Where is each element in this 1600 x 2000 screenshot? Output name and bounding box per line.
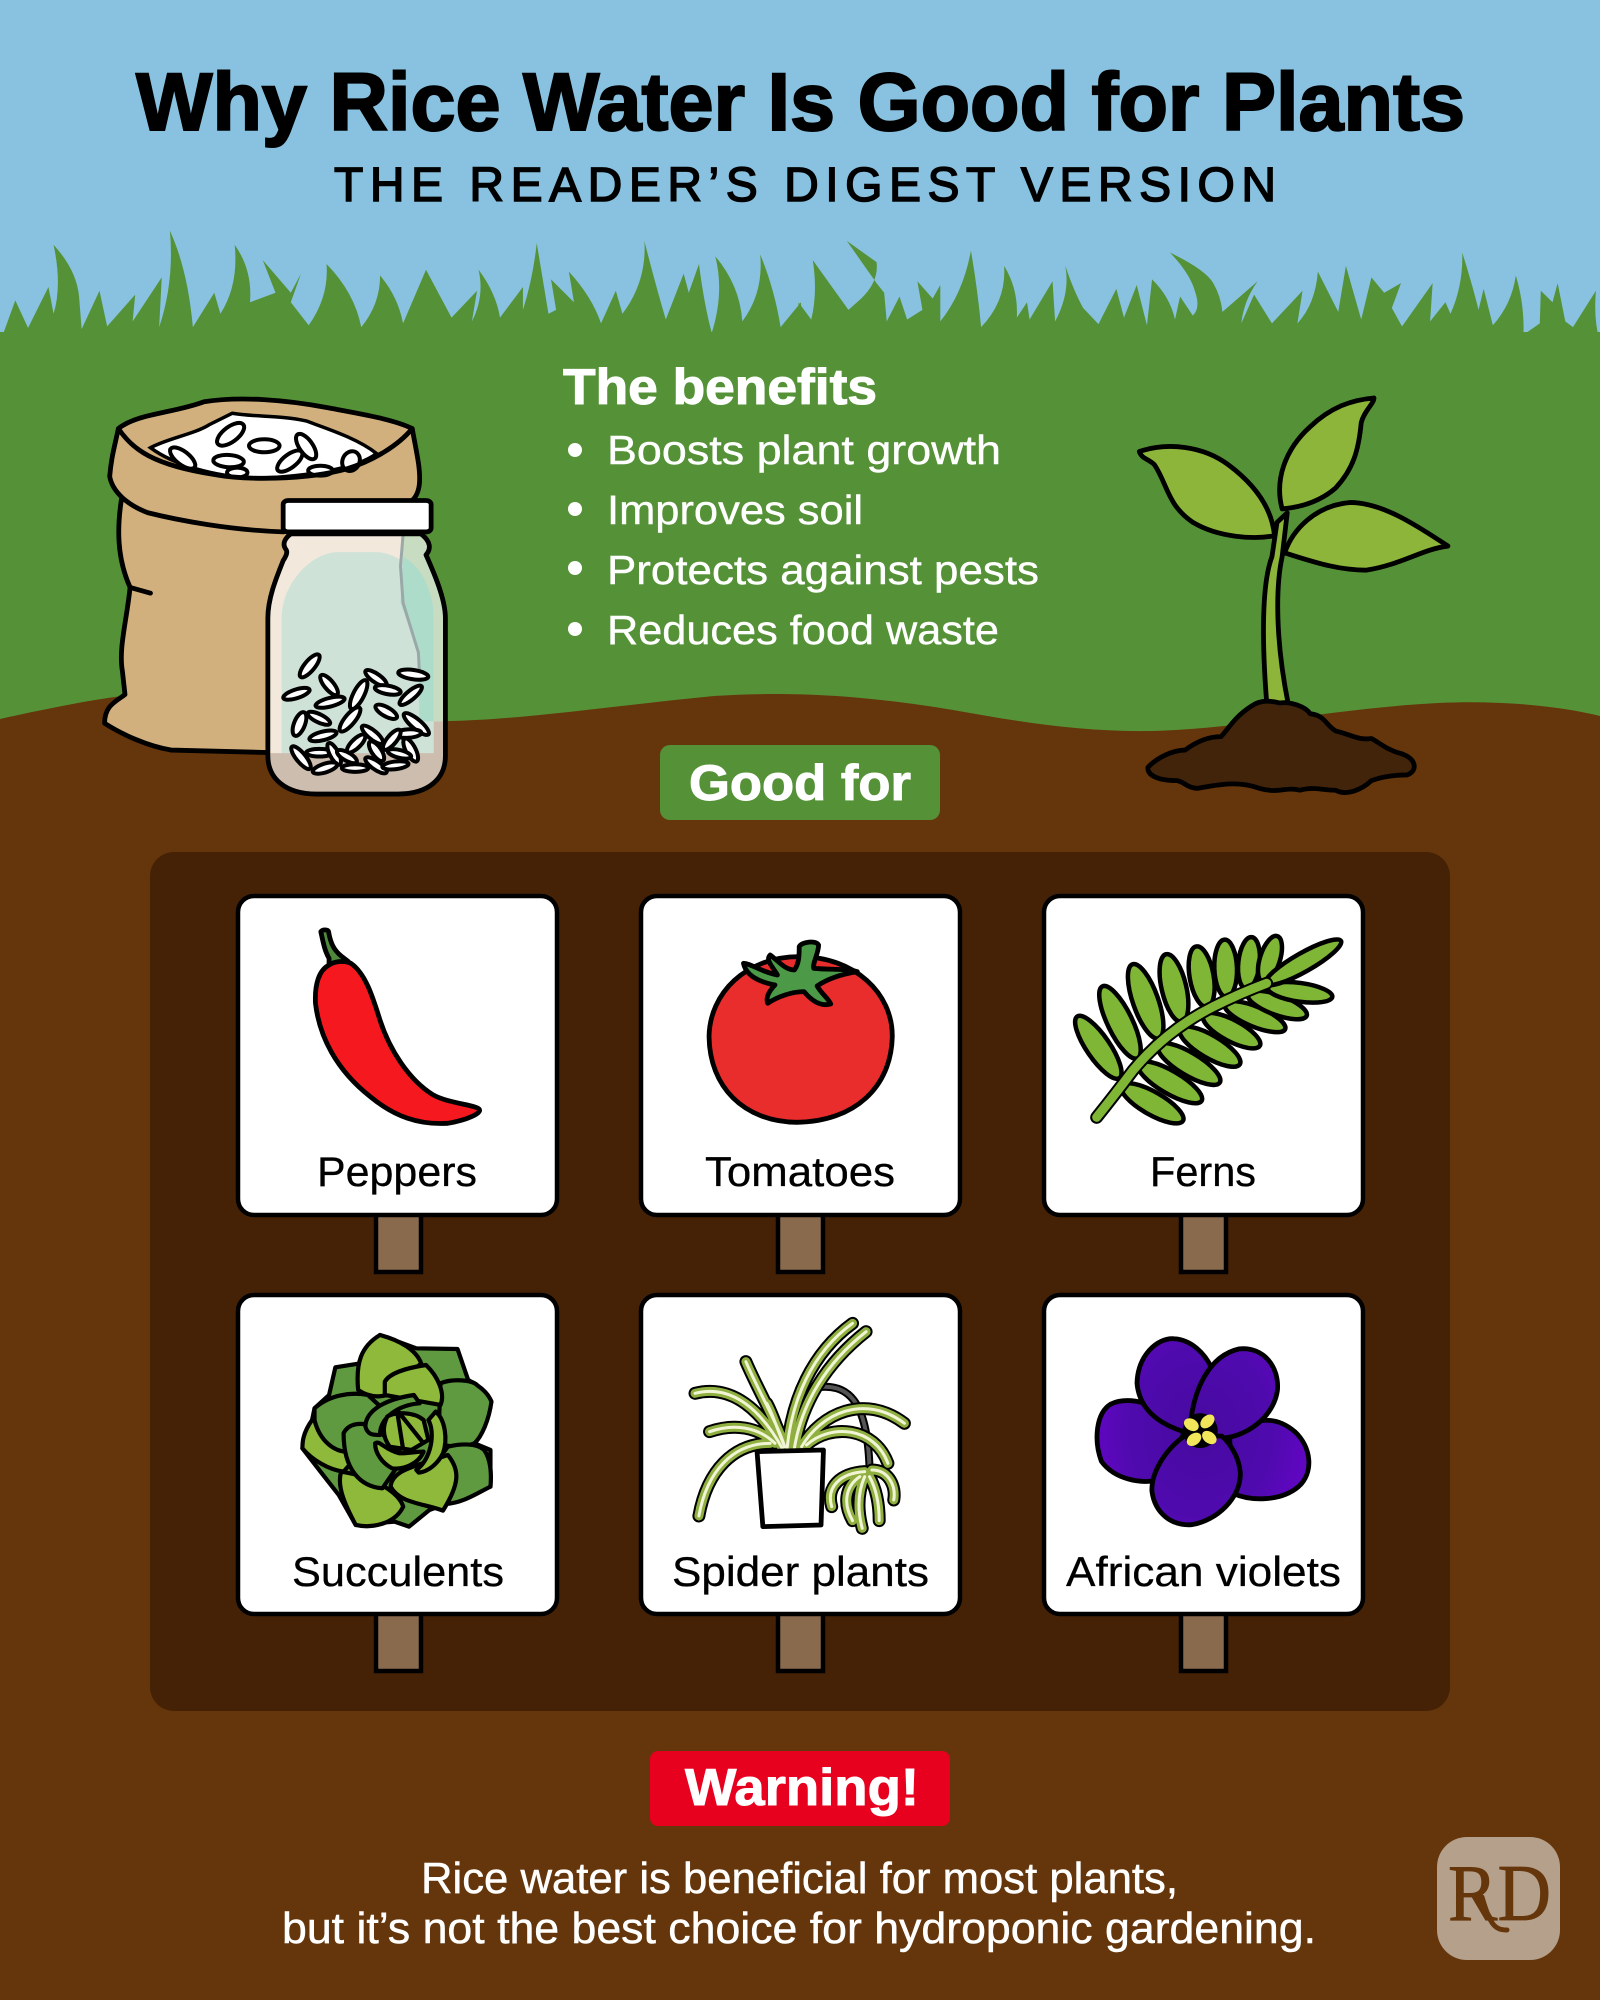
- soil ground: [0, 694, 1600, 2000]
- warning body text: but it’s not the best choice for hydroponic gardening.: [282, 1904, 1316, 1953]
- benefits heading: The benefits: [563, 359, 877, 415]
- benefits list: Reduces food waste: [607, 607, 999, 653]
- sign: tomatoes: [641, 896, 960, 1272]
- warning label: [650, 1751, 950, 1826]
- grass field: [0, 231, 1600, 752]
- RD logo: [1437, 1837, 1560, 1960]
- sign: succulents: Succulents: [292, 1548, 504, 1595]
- sign: african violets: [1044, 1295, 1363, 1671]
- panel: plant signs background: [150, 852, 1450, 1711]
- icon: jar of rice water: [268, 501, 445, 794]
- icon: fern frond: [1068, 933, 1346, 1131]
- icon: succulent rosette: [302, 1335, 491, 1527]
- icon: tomato: [709, 942, 892, 1122]
- icon: rice sack: [105, 399, 420, 753]
- subtitle: THE READER’S DIGEST VERSION: [334, 159, 1276, 212]
- benefits list: [568, 427, 1039, 653]
- good for label: [660, 745, 940, 820]
- sign: african violets: African violets: [1066, 1548, 1341, 1595]
- sign: peppers: Peppers: [317, 1148, 477, 1195]
- sign: spider plants: Spider plants: [672, 1548, 929, 1595]
- icon: chili pepper: [315, 930, 480, 1124]
- RD logo: RD: [1448, 1850, 1551, 1938]
- sky background: [0, 0, 1600, 760]
- benefits list: Improves soil: [607, 487, 863, 533]
- benefits list: Protects against pests: [607, 547, 1039, 593]
- icon: seedling in soil: [1139, 398, 1448, 793]
- warning label: Warning!: [685, 1759, 919, 1817]
- sign: ferns: [1044, 896, 1363, 1272]
- sign: peppers: [238, 896, 557, 1272]
- icon: spider plant in pot: [695, 1323, 904, 1528]
- sign: spider plants: [641, 1295, 960, 1671]
- title: Why Rice Water Is Good for Plants: [136, 57, 1465, 148]
- sign: tomatoes: Tomatoes: [705, 1148, 895, 1195]
- sign: ferns: Ferns: [1150, 1148, 1256, 1195]
- benefits list: Boosts plant growth: [607, 427, 1001, 473]
- warning body text: Rice water is beneficial for most plants,: [421, 1854, 1178, 1903]
- icon: african violet flower: [1097, 1339, 1309, 1525]
- good for label: Good for: [689, 755, 911, 811]
- sign: succulents: [238, 1295, 557, 1671]
- warning body text: [282, 1854, 1316, 1953]
- rice grains in jar: [281, 652, 432, 776]
